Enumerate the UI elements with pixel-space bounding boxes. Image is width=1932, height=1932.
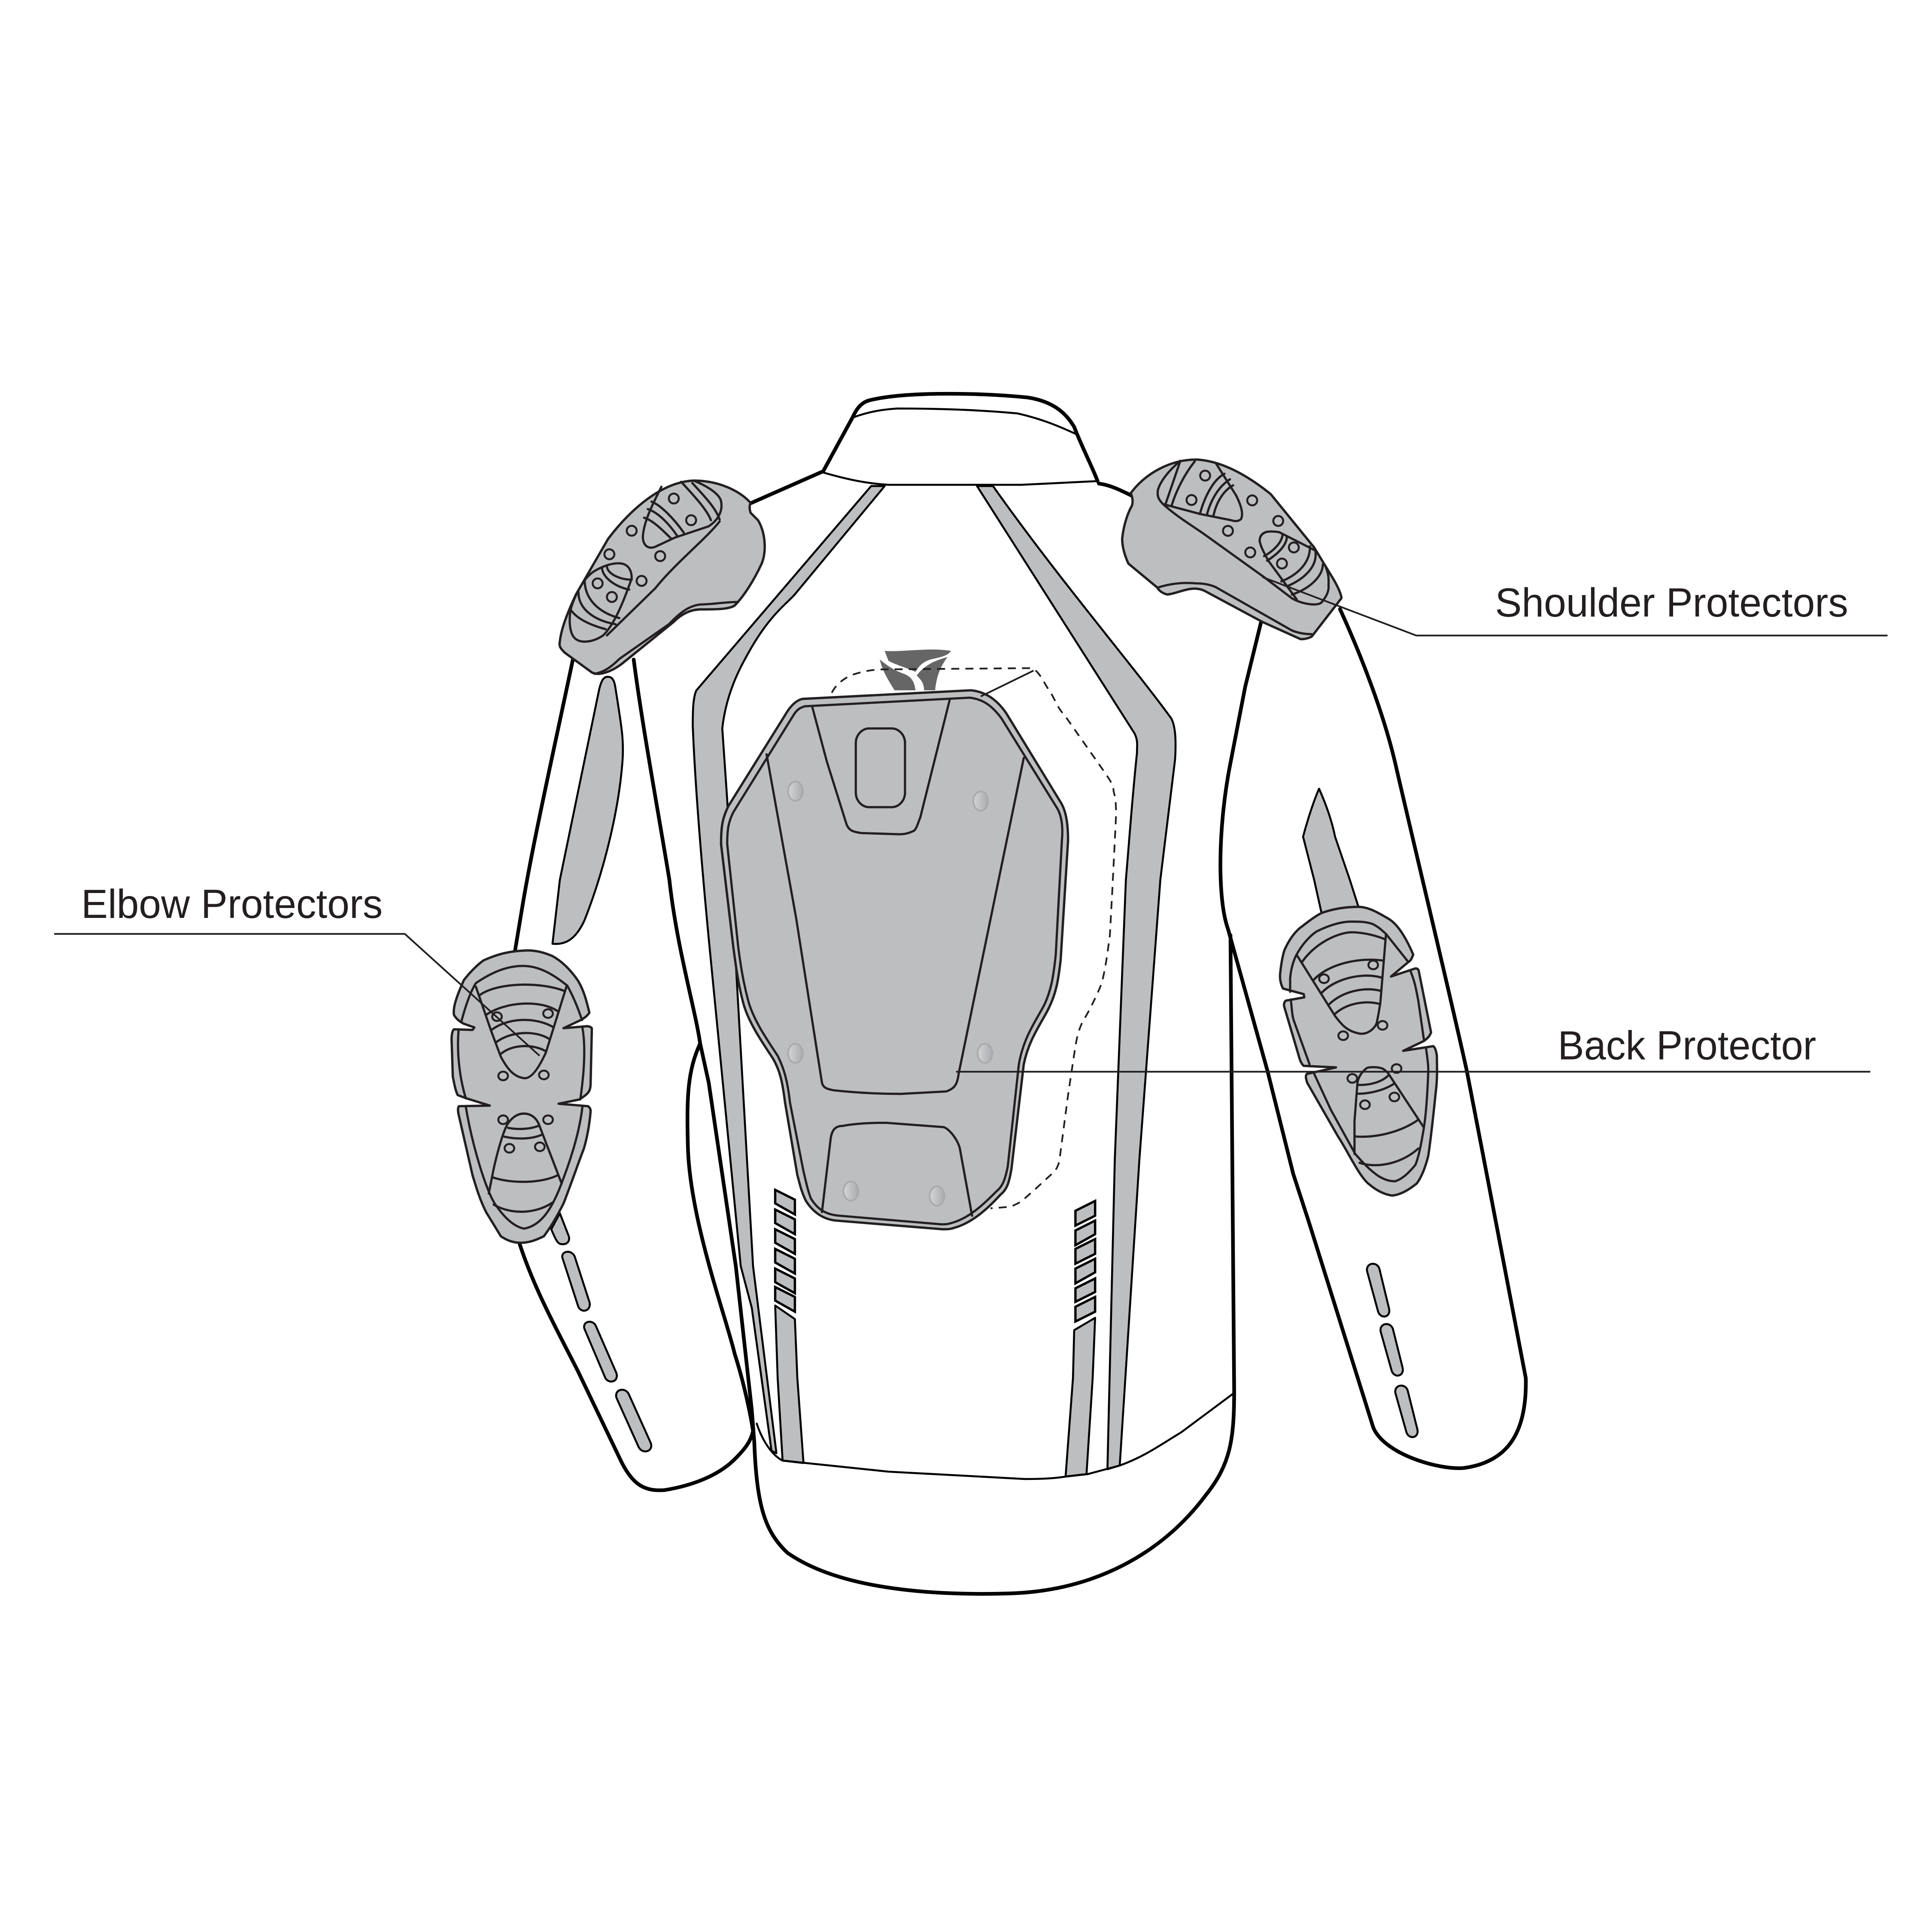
elbow upper window: [476, 986, 567, 1078]
callout: shoulder protectors: [1263, 577, 1887, 635]
callout: elbow protectors: Elbow Protectors: [81, 881, 383, 927]
elbow holes: [1319, 960, 1401, 1109]
shoulder upper window and diagonal: [607, 480, 721, 635]
elbow lower arcs: [492, 1126, 558, 1212]
vent slits left: [775, 1190, 795, 1312]
shoulder arcs: [1166, 461, 1323, 595]
shoulder lower window: [1260, 532, 1314, 599]
shoulder holes: [592, 494, 696, 602]
elbow lower window: [489, 1114, 562, 1194]
back protector lumbar panel: [822, 1123, 972, 1216]
shoulder arcs: [570, 482, 720, 629]
panel: right elbow protector: [1280, 907, 1437, 1196]
shoulder lower window: [570, 563, 632, 641]
back protector spine panel: [767, 754, 1024, 1094]
vent slits right: [1075, 1201, 1095, 1321]
back protector neck window: [856, 729, 905, 807]
elbow inner contours: [1290, 922, 1428, 1181]
callout: elbow protectors: [54, 881, 540, 1056]
callout: shoulder protectors: Shoulder Protectors: [1495, 580, 1848, 626]
elbow lower window: [1355, 1067, 1424, 1154]
shoulder holes: [1187, 471, 1299, 568]
panel: back protector: [721, 690, 1068, 1229]
shoulder lip line: [1157, 583, 1312, 634]
panel: left elbow protector: [452, 951, 592, 1243]
elbow upper arcs: [480, 984, 565, 1054]
back protector central yoke: [812, 699, 950, 834]
panel: right shoulder protector: [1122, 459, 1341, 639]
elbow holes: [492, 1009, 553, 1153]
elbow upper arcs: [1302, 932, 1385, 1014]
elbow lower arcs: [1355, 1076, 1418, 1165]
shoulder upper window: [1157, 461, 1329, 605]
elbow upper window: [1297, 934, 1386, 1034]
icon: brand logo: [880, 650, 951, 690]
dashed outline of back protector pocket: [832, 668, 1116, 1208]
panel: left shoulder protector: [559, 480, 765, 674]
callout: back protector pocket leader: [981, 671, 1033, 696]
grey jacket stripes: [553, 486, 1358, 1476]
shoulder lip line: [595, 602, 738, 674]
callout: back protector: Back Protector: [1558, 1023, 1816, 1069]
rivets: [788, 781, 992, 1206]
jacket outline: [514, 394, 1526, 1594]
sleeve reflective dashes: [551, 1213, 1418, 1452]
elbow inner contours: [458, 966, 584, 1229]
